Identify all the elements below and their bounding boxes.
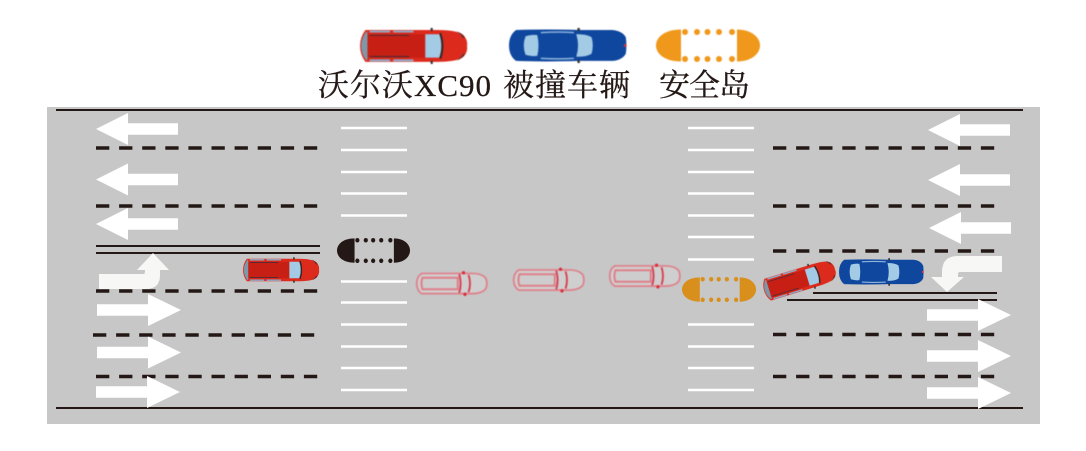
left side turn arrow <box>99 253 169 289</box>
right side turn arrow <box>931 256 1002 292</box>
right side lane arrows <box>927 114 1011 409</box>
legend <box>318 28 760 103</box>
legend label: struck vehicle: 被撞车辆 <box>503 68 630 103</box>
right lane markings <box>773 148 997 376</box>
legend icon: safety island <box>656 29 760 62</box>
struck blue car <box>839 258 924 286</box>
legend label: safety island: 安全岛 <box>659 68 750 103</box>
ghost car path 2 <box>514 268 584 292</box>
red car approaching <box>243 257 319 283</box>
left crosswalk <box>341 128 407 390</box>
left side lane arrows <box>96 113 181 408</box>
black safety island <box>337 238 410 263</box>
legend icon: struck vehicle <box>509 28 627 63</box>
road edge lines <box>56 110 1023 408</box>
red car at collision <box>760 257 839 303</box>
right crosswalk <box>688 128 754 390</box>
legend icon: Volvo XC90 <box>360 28 467 64</box>
ghost car path 1 <box>417 271 487 296</box>
legend label: Volvo XC90: 沃尔沃XC90 <box>318 68 491 103</box>
road surface <box>47 107 1040 424</box>
left lane markings <box>93 148 320 376</box>
orange safety island <box>682 277 756 302</box>
ghost car path 3 <box>610 264 680 288</box>
